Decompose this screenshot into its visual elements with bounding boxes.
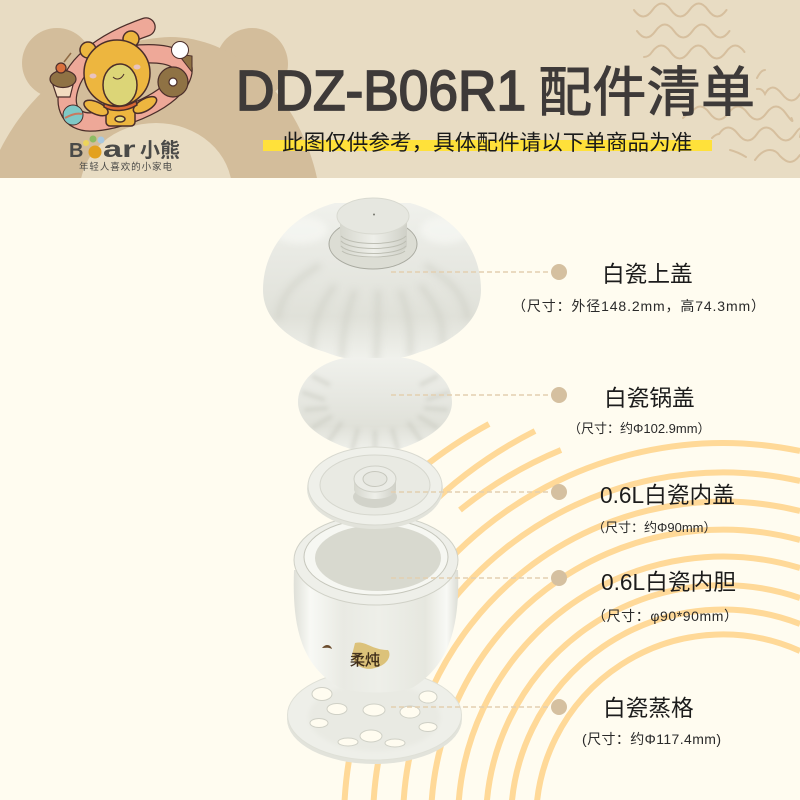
label: 0.6L白瓷内盖: （尺寸：约Φ90mm） (592, 520, 716, 535)
steam holes (310, 688, 437, 747)
cupcake (50, 53, 76, 97)
label: 0.6L白瓷内盖 (551, 482, 735, 535)
bear (80, 31, 159, 126)
brand logo mascot (50, 27, 192, 126)
brand logo text: ar (103, 137, 136, 162)
knob top (337, 198, 409, 234)
brand logo text (69, 134, 180, 173)
label: 白瓷上盖: （尺寸：外径148.2mm，高74.3mm） (512, 298, 765, 314)
ice cream (172, 42, 192, 72)
subtitle with highlight: 此图仅供参考，具体配件请以下单商品为准 (282, 126, 692, 157)
background concentric arcs (344, 424, 800, 800)
label: 0.6L白瓷内胆 (551, 569, 738, 624)
lid knob (353, 486, 397, 508)
page background (0, 178, 800, 800)
label: 0.6L白瓷内胆: （尺寸：φ90*90mm） (592, 608, 738, 624)
label: 0.6L白瓷内胆: 0.6L白瓷内胆 (601, 569, 736, 595)
label: 0.6L白瓷内盖: 0.6L白瓷内盖 (600, 482, 735, 508)
label: 白瓷锅盖 (551, 385, 711, 436)
header band (0, 0, 800, 178)
product: inner lid (307, 447, 443, 529)
ribbon (67, 27, 183, 122)
label: 白瓷蒸格 (551, 695, 721, 747)
decorative waves (634, 4, 800, 162)
product: steamer rack (287, 670, 462, 764)
label: 白瓷蒸格: 白瓷蒸格 (603, 695, 694, 721)
pot decal: 柔炖 (350, 649, 380, 670)
knob collar (329, 219, 417, 269)
leader lines (391, 272, 552, 707)
label: 白瓷上盖 (512, 261, 765, 314)
donut (158, 67, 188, 97)
product: inner pot body and rim (294, 515, 458, 692)
label: 白瓷上盖: 白瓷上盖 (602, 261, 693, 287)
label: 白瓷蒸格: (尺寸：约Φ117.4mm) (582, 731, 721, 747)
product: white porcelain pot lid (298, 358, 452, 453)
macaron (63, 105, 83, 125)
title: DDZ-B06R1 (236, 58, 526, 122)
label: 白瓷锅盖: 白瓷锅盖 (604, 385, 695, 411)
pot decal (322, 642, 389, 670)
title: 配件清单 (538, 48, 755, 127)
brand logo text: B (69, 140, 83, 162)
label: 白瓷锅盖: （尺寸：约Φ102.9mm） (568, 421, 711, 436)
knob thread (340, 218, 407, 258)
paw mark (83, 136, 104, 158)
title (236, 48, 755, 127)
product: white porcelain top lid (263, 198, 481, 361)
brand logo text: 年轻人喜欢的小家电 (79, 159, 172, 173)
brand logo text: 小熊 (140, 134, 180, 163)
bear silhouette (0, 28, 317, 178)
bear muzzle (81, 123, 231, 178)
